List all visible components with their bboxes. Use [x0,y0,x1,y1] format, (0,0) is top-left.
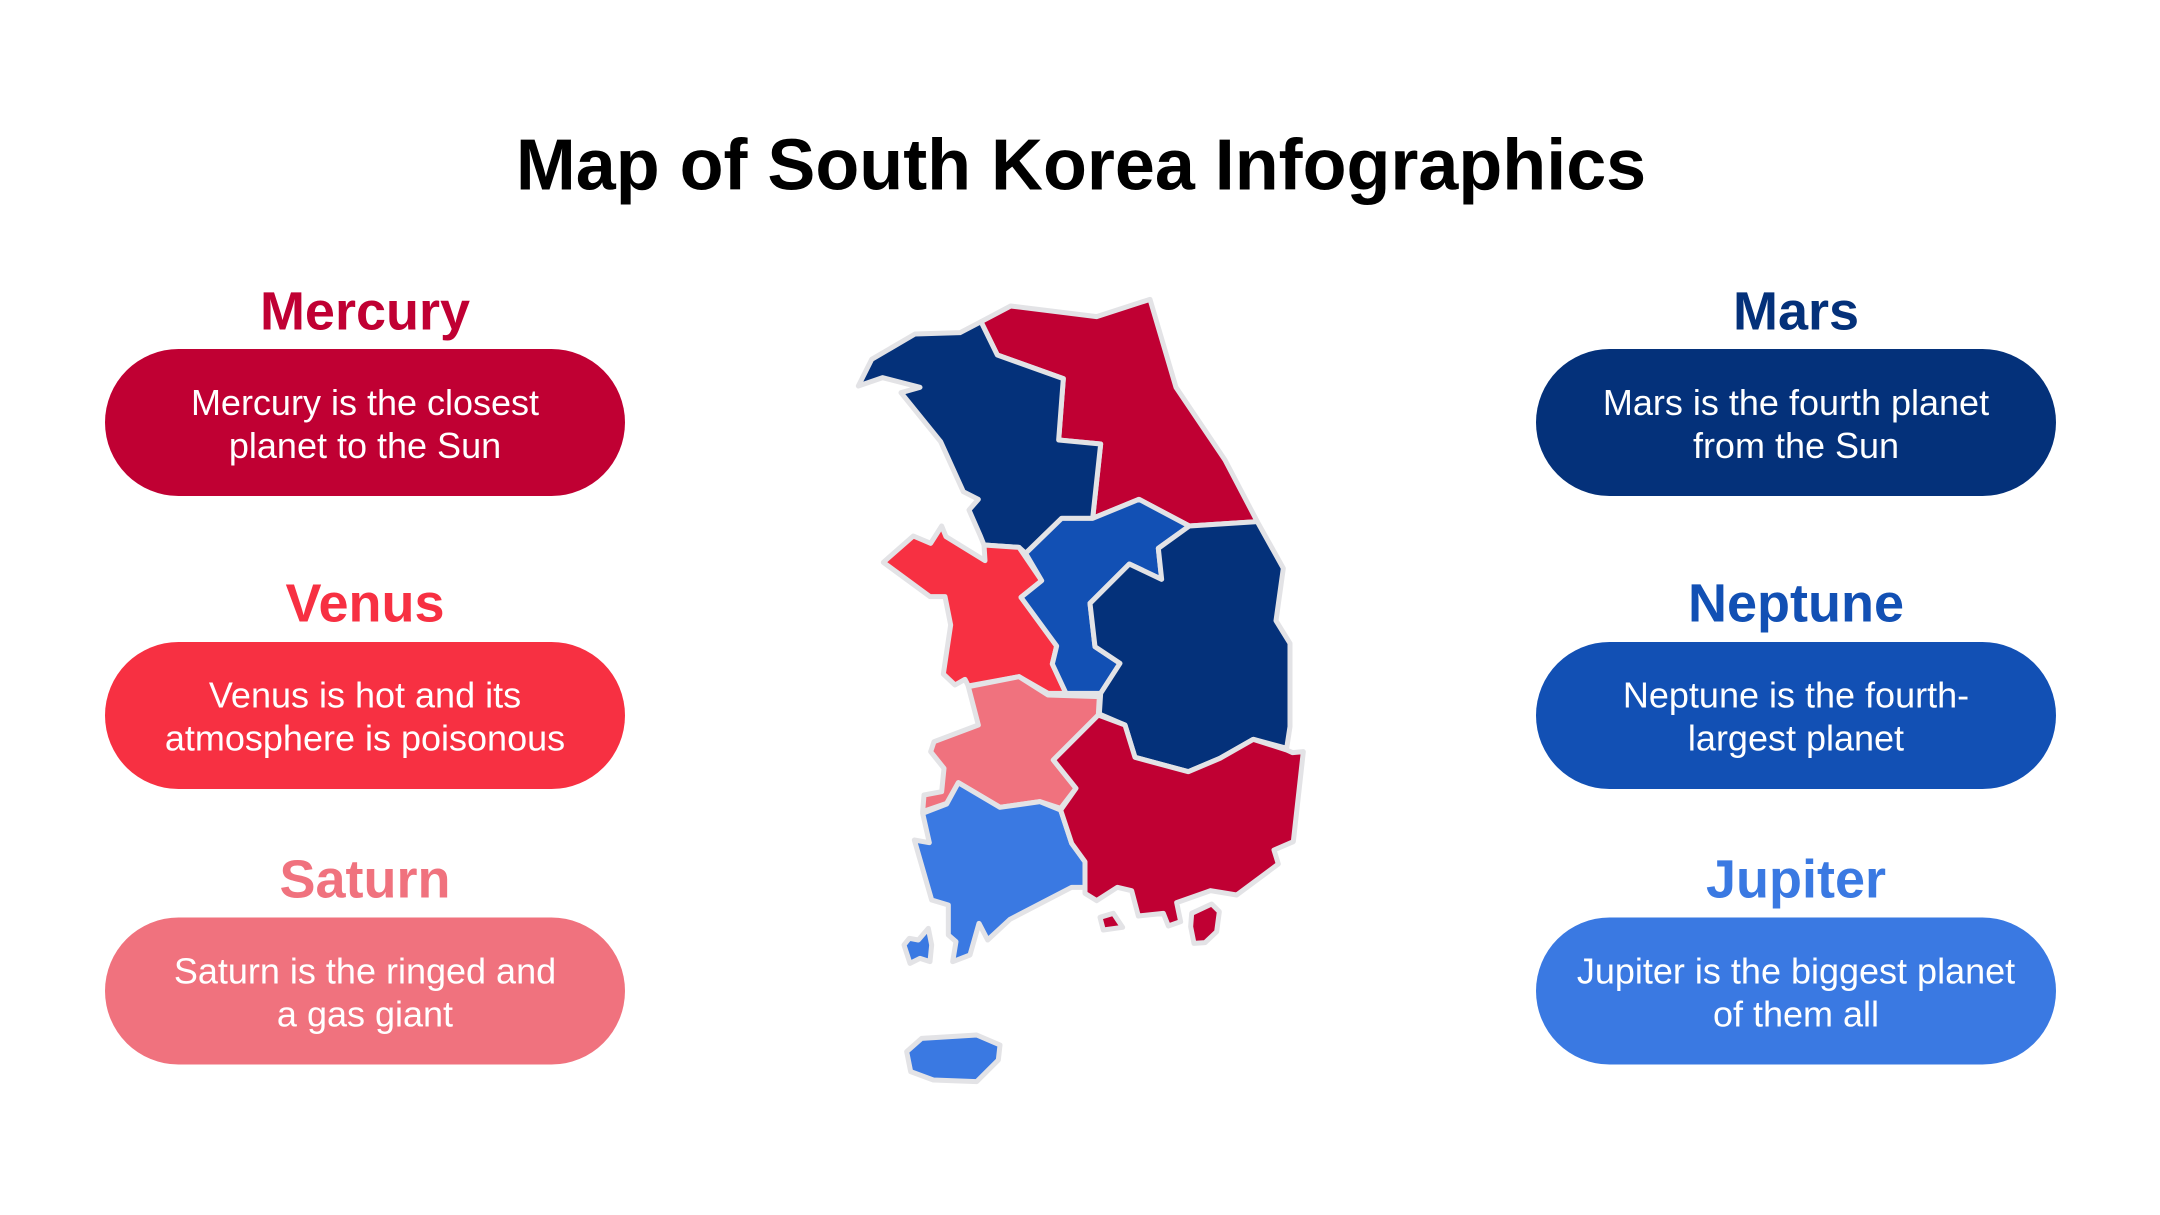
pill: Jupiter: of them all [1713,994,1879,1034]
heading: Mars: Mars [1733,282,1859,342]
pill: Mars: from the Sun [1693,425,1899,466]
region: Chungnam [883,526,1066,693]
region: Chungbuk [1021,499,1189,693]
pill: Saturn: Saturn is the ringed and [174,950,556,992]
pill: Venus: Venus is hot and its [209,674,521,716]
pill: Jupiter: Jupiter is the biggest planet [1577,950,2015,992]
region: Gyeongbuk [1090,522,1290,772]
panel: Jupiter [1536,850,2056,1064]
heading: Saturn: Saturn [279,850,451,910]
pill: Venus: atmosphere is poisonous [165,718,565,758]
heading: Neptune: Neptune [1688,574,1904,634]
pill: Jupiter [1536,918,2056,1064]
pill: Venus [105,642,625,789]
panel: Saturn [105,850,625,1064]
panel: Mars [1536,282,2056,496]
pill: Saturn: a gas giant [277,994,453,1034]
heading: Mercury: Mercury [260,282,470,342]
pill: Mars [1536,349,2056,496]
panel: Mercury [105,282,625,496]
region: Gyeonggi [858,322,1101,553]
pill: Mercury [105,349,625,496]
region: Jeju island [907,1035,1000,1082]
region: Jeonbuk [923,677,1099,812]
panel: Neptune [1536,574,2056,789]
region: Gyeongnam [1053,715,1303,943]
pill: Mars: Mars is the fourth planet [1603,382,1989,423]
pill: Saturn [105,918,625,1064]
pill: Neptune: Neptune is the fourth- [1623,674,1969,716]
title: Map of South Korea Infographics [516,126,1646,206]
pill: Mercury: planet to the Sun [229,425,501,466]
pill: Mercury: Mercury is the closest [191,382,539,423]
map of South Korea [858,299,1303,1082]
pill: Neptune [1536,642,2056,789]
pill: Neptune: largest planet [1688,718,1904,758]
heading: Venus: Venus [285,574,445,634]
heading: Jupiter: Jupiter [1706,850,1886,910]
panel: Venus [105,574,625,789]
region: Gangwon [981,299,1257,526]
region: Jeonnam [904,783,1085,963]
